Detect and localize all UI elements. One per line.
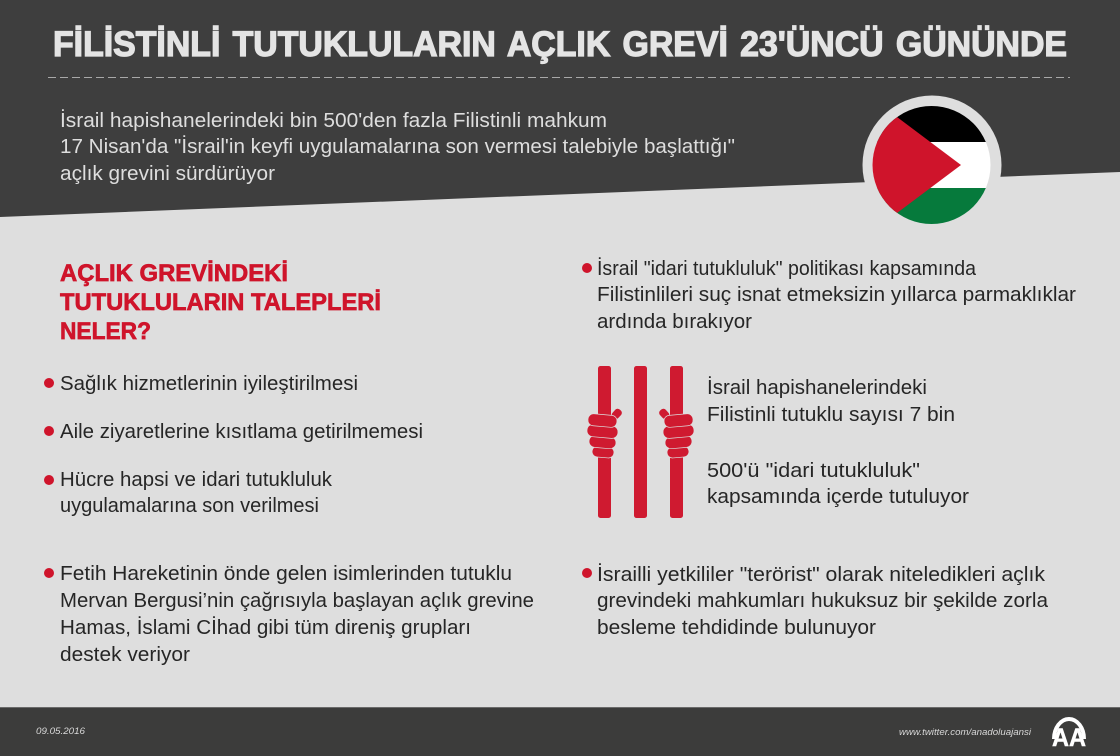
intro text block: açlık grevini sürdürüyor xyxy=(60,163,275,185)
heading: demands: AÇLIK GREVİNDEKİ xyxy=(60,260,288,287)
text block: prisoner numbers: 500'ü "idari tutukluluk" xyxy=(707,460,920,482)
bullet: force feeding threat xyxy=(582,563,1049,639)
text block: prisoner numbers: İsrail hapishanelerindeki xyxy=(707,376,927,399)
icon: hands gripping prison bars xyxy=(586,366,695,518)
text block: prisoner numbers: kapsamında içerde tutuluyor xyxy=(707,486,969,508)
bullet: administrative detention: ardında bırakıyor xyxy=(597,311,752,333)
bullet: Fatah and Bergusi call: Mervan Bergusi’nin çağrısıyla başlayan açlık grevine xyxy=(60,590,534,612)
icon: Anadolu Agency logo: AA xyxy=(1052,724,1086,752)
title: FİLİSTİNLİ TUTUKLULARIN AÇLIK GREVİ 23'ÜNCÜ GÜNÜNDE xyxy=(53,24,1067,64)
bullet: administrative detention xyxy=(582,257,1076,333)
icon: Palestinian flag badge xyxy=(860,96,1002,234)
panel: footer bar xyxy=(0,707,1120,756)
bullet: force feeding threat: grevindeki mahkumları hukuksuz bir şekilde zorla xyxy=(597,590,1049,612)
bullet: force feeding threat: besleme tehdidinde bulunuyor xyxy=(597,617,876,639)
heading: demands: NELER? xyxy=(60,318,151,345)
bullet: Fatah and Bergusi call xyxy=(44,563,534,666)
bullet: administrative detention: Filistinlileri suç isnat etmeksizin yıllarca parmaklıklar xyxy=(597,284,1076,306)
text block: prisoner numbers: Filistinli tutuklu sayısı 7 bin xyxy=(707,404,955,426)
intro text block: İsrail hapishanelerindeki bin 500'den fazla Filistinli mahkum xyxy=(60,109,607,132)
bullet: family visits: Aile ziyaretlerine kısıtlama getirilmemesi xyxy=(60,421,423,443)
bullet: solitary confinement: uygulamalarına son verilmesi xyxy=(60,495,319,517)
text block: prisoner numbers xyxy=(707,376,969,508)
heading: demands: TUTUKLULARIN TALEPLERİ xyxy=(60,289,381,316)
bullet: Fatah and Bergusi call: destek veriyor xyxy=(60,644,190,666)
bullet: Fatah and Bergusi call: Fetih Hareketinin önde gelen isimlerinden tutuklu xyxy=(60,563,512,585)
footer twitter url: www.twitter.com/anadoluajansi xyxy=(899,727,1032,738)
bullet: Fatah and Bergusi call: Hamas, İslami Cİhad gibi tüm direniş grupları xyxy=(60,616,471,639)
intro text block xyxy=(60,109,735,185)
bullet: force feeding threat: İsrailli yetkililer "terörist" olarak niteledikleri açlık xyxy=(597,563,1046,586)
bullet: solitary confinement xyxy=(44,469,333,517)
footer date: 09.05.2016 xyxy=(36,726,86,737)
heading: demands xyxy=(60,260,381,345)
bullet: solitary confinement: Hücre hapsi ve idari tutukluluk xyxy=(60,469,333,491)
panel: dark slanted header xyxy=(0,0,1120,217)
intro text block: 17 Nisan'da "İsrail'in keyfi uygulamalarına son vermesi talebiyle başlattığı" xyxy=(60,135,735,158)
bullet: health services: Sağlık hizmetlerinin iyileştirilmesi xyxy=(60,373,358,395)
bullet: administrative detention: İsrail "idari tutukluluk" politikası kapsamında xyxy=(597,257,977,280)
